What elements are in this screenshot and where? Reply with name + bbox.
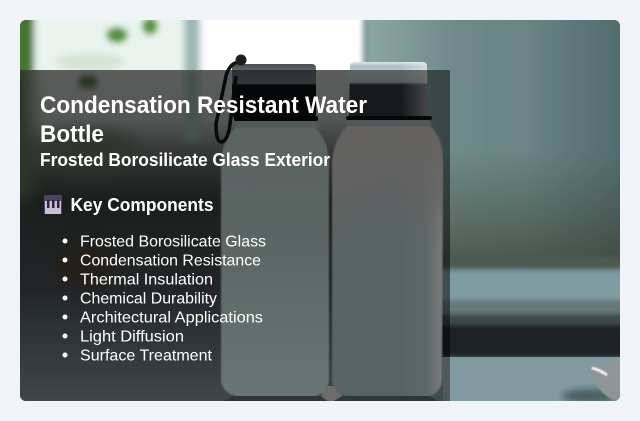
list: key components: Surface Treatment [80, 348, 213, 364]
photo: metal dish [589, 359, 620, 401]
text block: title [40, 92, 367, 148]
subtitle: Frosted Borosilicate Glass Exterior [40, 150, 330, 170]
list: key components: Thermal Insulation [80, 272, 213, 288]
photo: bottle left [216, 54, 329, 401]
list: key components: Architectural Applications [80, 310, 263, 326]
text block: title: Condensation Resistant Water [40, 92, 367, 119]
icon: piano keys [44, 195, 62, 214]
list: key components [62, 234, 266, 364]
text block: title: Bottle [40, 121, 104, 148]
list: key components: Light Diffusion [80, 328, 184, 346]
list: key components: Chemical Durability [80, 290, 217, 308]
heading: key components: Key Components [70, 195, 214, 215]
photo: bottle right [332, 62, 443, 401]
list: key components: Frosted Borosilicate Glass [80, 234, 266, 250]
list: key components: Condensation Resistance [80, 252, 261, 270]
overlay panel [20, 70, 450, 401]
strap loop [216, 62, 240, 142]
